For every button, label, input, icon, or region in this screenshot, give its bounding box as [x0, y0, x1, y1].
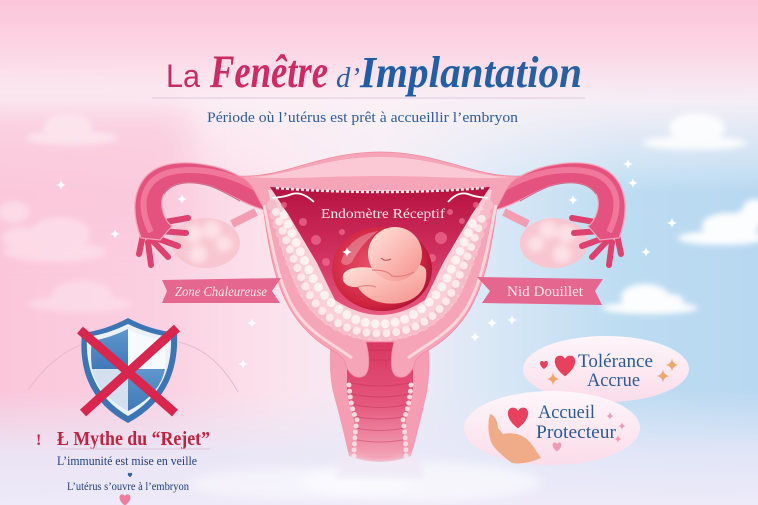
panel: tolerance accrue — [523, 336, 689, 402]
title: Implantation — [359, 48, 582, 97]
decidua lining — [272, 205, 488, 336]
fimbriae — [139, 218, 188, 265]
left adnexa — [135, 163, 278, 268]
clouds left — [0, 114, 132, 312]
ligament — [232, 212, 256, 224]
panel: tolerance accrue: Tolérance — [578, 351, 653, 372]
divider — [60, 448, 210, 450]
fallopian tube — [135, 163, 278, 240]
arc behind shield — [28, 340, 238, 392]
panel: accueil protecteur: Protecteur — [536, 422, 617, 443]
lower mist — [190, 462, 540, 502]
banner: zone chaleureuse: Zone Chaleureuse — [175, 285, 267, 300]
ovary — [520, 218, 588, 268]
icon: pink sparkles — [553, 412, 626, 452]
banner: nid douillet — [477, 277, 603, 305]
banner: nid douillet: Nid Douillet — [507, 284, 584, 300]
banner: zone chaleureuse — [162, 278, 281, 303]
cavity top frill — [276, 188, 484, 192]
right adnexa — [482, 163, 625, 268]
subtitle: Période où l’utérus est prêt à accueillir l’embryon — [207, 110, 519, 126]
title: d’ — [336, 63, 360, 94]
panel: tolerance accrue: Accrue — [587, 370, 640, 391]
title — [166, 46, 582, 98]
ovary — [172, 218, 240, 268]
sparkles — [56, 159, 677, 369]
cavity flecks — [281, 202, 479, 266]
uterine wall — [240, 152, 520, 377]
inner wall line — [264, 205, 496, 358]
uterus diagram — [135, 152, 625, 478]
fimbriae — [572, 218, 621, 265]
red cross — [80, 328, 177, 413]
endometre label: Endomètre Réceptif — [321, 207, 445, 222]
icon: hearts — [540, 356, 575, 376]
myth heading: Ł Mythe du “Rejet” — [57, 428, 210, 450]
panel: accueil protecteur: Accueil — [538, 402, 595, 423]
icon: heart — [508, 408, 528, 428]
panel: accueil protecteur — [464, 391, 640, 465]
title: La — [166, 58, 200, 94]
fundus highlight — [250, 157, 510, 178]
panel: myth of rejection — [28, 318, 238, 505]
icon: gold sparkles — [546, 358, 678, 386]
fallopian tube — [482, 163, 625, 240]
decidua base — [268, 190, 492, 341]
myth line 1: L’immunité est mise en veille — [57, 453, 197, 468]
embryo sac — [332, 227, 432, 311]
endometrium cavity — [270, 187, 490, 315]
icon: crossed shield — [80, 318, 177, 423]
title divider — [152, 97, 585, 99]
myth line 2: L’utérus s’ouvre à l’embryon — [67, 479, 189, 493]
small heart — [128, 473, 132, 477]
icon: hand — [488, 414, 541, 463]
myth heading: ! — [36, 432, 41, 449]
white squiggles — [272, 193, 488, 202]
ligament — [504, 212, 528, 224]
vagina — [330, 338, 429, 478]
clouds right — [602, 113, 758, 314]
title: Fenêtre — [209, 46, 328, 98]
embryo — [343, 227, 426, 304]
bottom heart — [120, 494, 130, 505]
